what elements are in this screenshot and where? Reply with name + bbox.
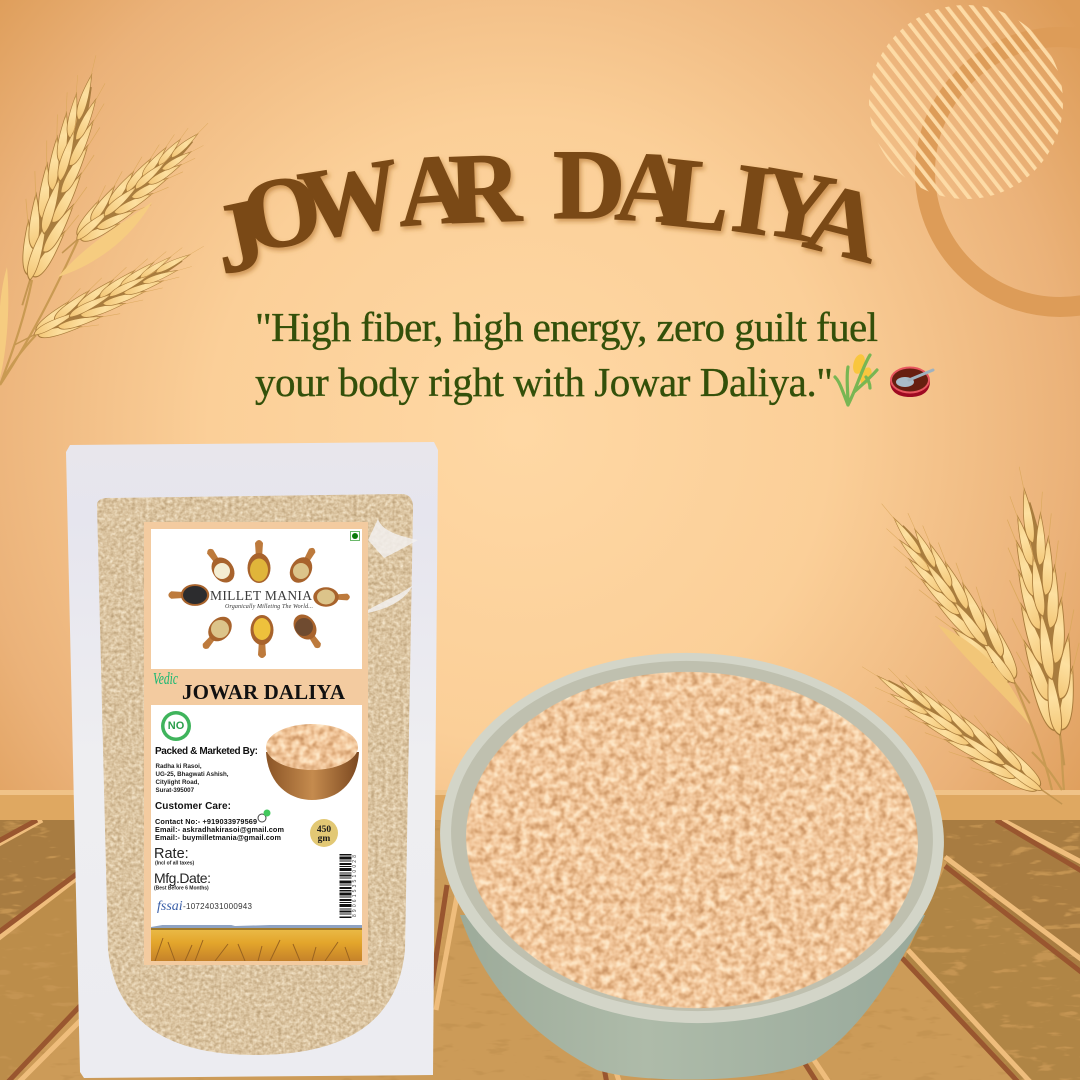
- product pouch: [66, 442, 438, 1078]
- weight badge: [310, 819, 338, 847]
- weight badge: 450: [317, 825, 331, 835]
- contacts: Email:- askradhakirasoi@gmail.com: [155, 825, 284, 834]
- tagline: [255, 304, 933, 405]
- wheat field illustration: [151, 925, 362, 961]
- title word: DALIYA: DALIYA: [553, 129, 893, 285]
- decorative ring: [925, 37, 1080, 307]
- pouch wrapper: [66, 442, 438, 1078]
- address: Radha ki Rasoi,: [156, 763, 202, 770]
- barcode: 8906153510028: [352, 855, 358, 917]
- label backing: [144, 522, 368, 965]
- address: Surat-395007: [156, 787, 195, 794]
- product name: JOWAR DALIYA: [182, 680, 346, 704]
- icon: rice plant: [835, 353, 877, 405]
- tagline line 1: "High fiber, high energy, zero guilt fuel: [255, 304, 878, 350]
- wheat ear A: [988, 461, 1080, 770]
- leaf: [938, 625, 1030, 725]
- wheat ear 3: [5, 228, 215, 365]
- small wooden bowl: [266, 724, 359, 800]
- no artificial badge: [161, 711, 191, 741]
- wheat sprig: top left: [0, 47, 226, 385]
- skirting board: [0, 790, 1080, 820]
- background wall: [0, 0, 1080, 795]
- bowl of jowar daliya: [434, 644, 950, 1079]
- icon: phone and whatsapp: [258, 810, 270, 822]
- label lower panel: [151, 705, 362, 925]
- wheat ear 2: [46, 106, 226, 272]
- wheat sprig: bottom right: [849, 461, 1080, 824]
- bowl body: [460, 915, 925, 1079]
- customer care: Customer Care:: [155, 801, 231, 812]
- leaves: [0, 202, 152, 378]
- fssai number: -10724031000943: [183, 902, 253, 911]
- weight badge: gm: [318, 834, 330, 844]
- stems: [0, 240, 78, 385]
- tagline line 2: your body right with Jowar Daliya.": [255, 359, 833, 405]
- bowl rim: [434, 644, 950, 1032]
- rate note: (Incl of all taxes): [155, 860, 195, 866]
- wheat ear C: [849, 645, 1076, 824]
- title word: JOWAR: JOWAR: [203, 131, 525, 296]
- wooden floor: [0, 820, 1080, 1080]
- Vedic: Vedic: [153, 669, 178, 688]
- contacts: [155, 817, 284, 842]
- rate: Rate:: [154, 846, 189, 862]
- veg mark: [350, 532, 360, 540]
- pouch highlights: [368, 519, 418, 613]
- barcode: [346, 854, 358, 918]
- fssai logo: fssai: [157, 899, 183, 914]
- pouch grain fill: [97, 494, 413, 1055]
- packed by: Packed & Marketed By:: [155, 746, 258, 757]
- label top panel: logo: [151, 529, 362, 669]
- mfg date: Mfg.Date:: [154, 870, 211, 886]
- address: UG-25, Bhagwati Ashish,: [156, 771, 229, 778]
- wheat ear B: [861, 486, 1053, 720]
- brand name: MILLET MANIA: [210, 588, 312, 603]
- wheat ear 1: [0, 47, 128, 314]
- product label: [144, 522, 368, 965]
- stems: [1015, 683, 1064, 790]
- striped circle: [869, 5, 1063, 199]
- no artificial badge: NO: [168, 720, 185, 732]
- daliya grains: [460, 664, 924, 1016]
- contacts: Email:- buymilletmania@gmail.com: [155, 833, 282, 842]
- title: JOWAR DALIYA: [203, 129, 893, 296]
- address: [156, 763, 229, 794]
- best before: (Best Before 6 Months): [154, 886, 209, 892]
- millet spoons: [168, 540, 350, 658]
- brand slogan: Organically Milleting The World...: [225, 604, 313, 610]
- address: Citylight Road,: [156, 779, 199, 786]
- contacts: Contact No:- +919033979569: [155, 817, 257, 826]
- icon: bowl with spoon: [890, 366, 933, 397]
- bowl inner wall: [445, 653, 939, 1019]
